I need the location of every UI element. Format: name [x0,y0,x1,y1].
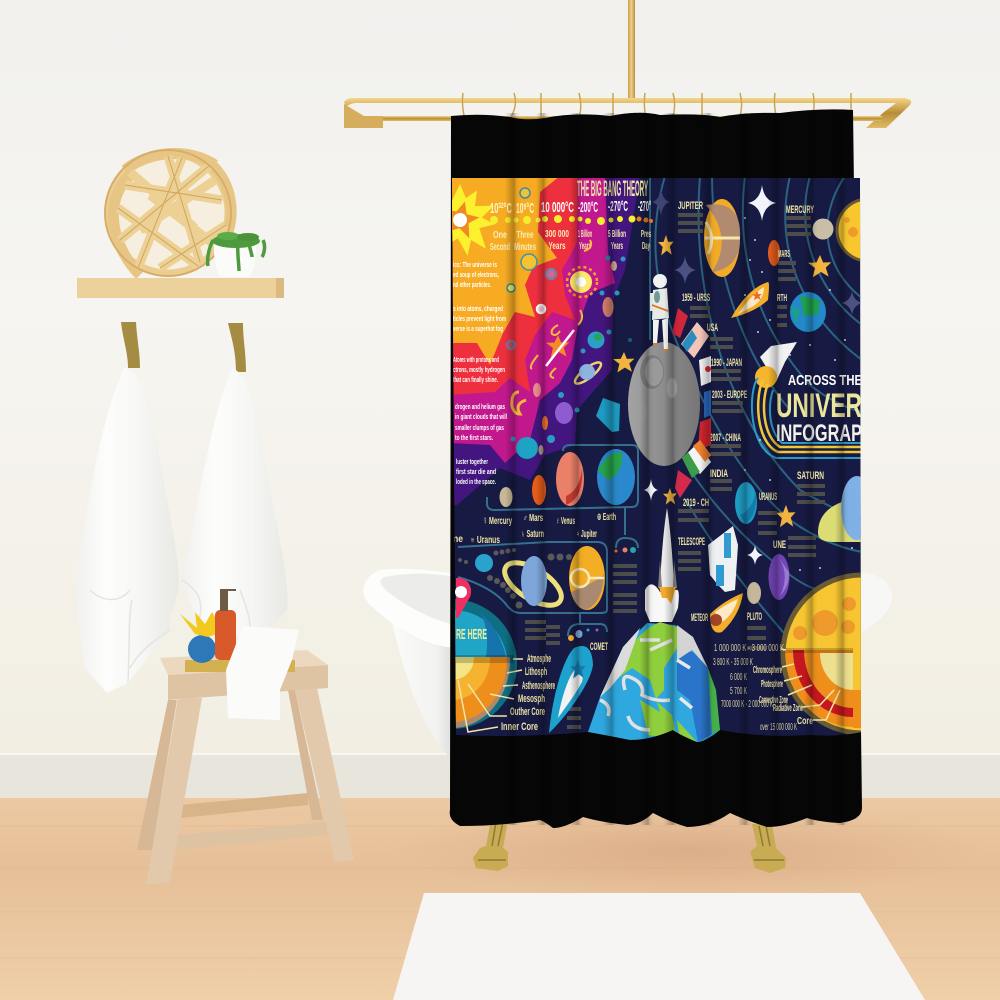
jupiter [704,199,740,277]
galaxies and atoms in colour bands [507,188,597,414]
era labels [490,230,651,251]
planet symbols and names [454,512,616,543]
space programme timeline labels: METEOR [691,612,708,624]
era labels: Day [642,241,650,252]
era labels: 1 Billion [578,229,592,240]
temperature scale: -270°C [608,198,628,215]
planet symbols and names: ♄ Saturn [521,529,544,540]
era labels: One [493,230,507,241]
history text blocks: s into atoms, charged [453,304,503,313]
temperature scale: 10 000°C [541,199,574,216]
crystal [596,398,620,432]
gold tray [185,660,295,672]
earth layer labels [458,653,555,733]
history text blocks: nd other particles. [453,280,491,289]
era labels: Years [579,241,591,252]
space shuttle [755,342,797,388]
history text blocks: loded in the space. [456,477,496,486]
history text blocks: in giant clouds that will [455,412,507,421]
wall background [0,0,1000,760]
space programme timeline labels: 2007 - CHINA [710,432,741,444]
temperature scale: -200°C [578,199,598,216]
earth layer labels: Atmosphe [527,653,551,665]
era labels: 5 Billion [608,229,626,240]
history text blocks: ics: The universe is [453,260,497,269]
planet symbols and names: ☿ Mercury [483,516,512,527]
rocket smoke [645,584,679,622]
shower curtain [450,109,862,828]
printed artwork: Pres [641,229,651,240]
blue vase with yellow flower [180,612,228,663]
jupiter small [569,546,605,610]
temperature scale [490,200,651,213]
moon [628,342,700,466]
right curtain foot [750,824,786,873]
star speckles [744,217,853,571]
bath rug [393,893,925,1000]
printed artwork: Asthenosphere [522,680,555,692]
printed artwork: -270° [638,198,651,215]
space programme timeline labels: USA [707,322,718,334]
history text blocks: ctrons, mostly hydrogen [453,365,505,374]
space programme timeline labels: TELESCOPE [678,536,705,548]
big sun cross-section [783,575,941,733]
earth planet [790,292,826,332]
sun layer temperatures and names: 3 800 K - 35 000 K [713,657,753,668]
title rainbow stripes [752,378,862,458]
printed artwork: RTH [777,293,787,304]
sun layer temperatures and names: Core [797,716,813,727]
history text blocks: luster together [456,457,488,466]
comet orange [731,282,769,318]
grey dot trails [458,548,572,608]
era labels: Years [548,241,566,252]
neptune planet [768,554,790,600]
orbit lines [650,176,862,640]
planet symbols and names: ♂ Mars [523,513,543,524]
text placeholder bars [525,484,825,729]
map pin [455,578,471,618]
saturn large [818,476,873,542]
era labels: 300 000 [545,229,569,240]
main title: UNIVER [776,387,862,425]
mercury planet [812,218,834,240]
sun layer temperatures and names [713,643,840,733]
history text blocks: ed soup of electrons, [453,270,499,279]
planet symbols and names: ♃ Jupiter [576,529,597,540]
planet symbols and names: ne [453,534,463,545]
jupiter label: JUPITER [678,200,703,212]
sun layer temperatures and names: 5 700 K [730,686,747,697]
space programme timeline labels: INDIA [710,468,728,480]
uranus [735,482,757,524]
left curtain foot [473,820,508,871]
curtain fold shading [505,113,849,825]
decorative four point stars [644,185,863,565]
earth layer labels: Inner Core [501,721,538,733]
sun layer temperatures and names: over 15 000 000 K [760,722,797,733]
space programme timeline labels: 1990 - JAPAN [711,357,742,369]
history text blocks: verse is a superhot fog [453,324,503,333]
sun layer temperatures and names: 7000 000 K - 2 000 000 K [721,699,773,710]
era labels: Minutes [514,242,536,253]
timeline dots [490,215,653,225]
mars label [778,249,796,281]
potted plant [208,232,265,277]
satellite telescope [708,526,738,592]
printed artwork: COMET [590,641,608,653]
cosmic colour bands [450,170,640,505]
sun top right [836,198,860,262]
bathtub [363,569,892,764]
history text blocks: drogen and helium gas [455,402,505,411]
printed artwork [452,178,861,742]
flags around the moon [672,308,711,498]
pluto planet [747,582,761,604]
mercury label [786,204,814,236]
temperature scale: 10³²°C [490,200,512,217]
earth label [777,293,787,327]
earth at launch pad [588,622,720,746]
comet blue [549,646,593,733]
earth layer labels: Outher Core [510,706,545,718]
jupiter label [678,200,703,233]
shower rod [344,0,911,128]
printed artwork: PLUTO [747,611,762,623]
history text blocks: that can finally shine. [453,375,498,384]
woven wicker disc [105,150,231,276]
era labels: Three [516,230,534,241]
small earth bubble [588,332,604,348]
main title: ACROSS THE [788,372,862,389]
saturn small [502,556,564,608]
right towel [182,368,287,640]
rocket [658,508,677,604]
planet symbols and names: ♀ Venus [556,516,575,527]
temperature scale: 10⁹°C [516,200,534,217]
tiny planets row [568,547,636,641]
earth layer labels: Mesosph [518,693,545,705]
inner planets row [500,449,635,507]
neptune label: UNE [773,539,786,551]
neptune small [475,554,493,572]
planet symbols and names: ♅ Uranus [470,535,500,546]
small ringed planet [574,361,602,385]
sun layer temperatures and names: Convective Zone [759,695,788,706]
space programme timeline labels: 1959 - URSS [682,292,710,304]
sun layer temperatures and names: 1 000 000 K - 3 000 000 K [714,643,784,654]
left towel [75,368,179,693]
main title [777,375,860,441]
astronaut [650,274,669,350]
planet connector lines [458,445,638,636]
sun layer temperatures and names: 6 000 K [730,672,747,683]
history text blocks: ticles prevent light from [453,314,506,323]
printed artwork: THE BIG BANG THEORY [577,176,648,201]
meteor [710,593,743,633]
curtain black fabric [450,109,862,828]
mars planet [768,240,780,266]
printed artwork: 2003 - EUROPE [712,389,747,401]
saturn label: SATURN [797,470,824,482]
space programme timeline labels: 2019 - CH [683,497,709,509]
history text blocks: Atoms with protons and [453,355,499,364]
soap dispenser [215,589,236,660]
wooden stool [137,650,354,885]
printed artwork: RE HERE [456,626,487,643]
era labels: Years [611,241,623,252]
mercury label: MERCURY [786,204,814,216]
history text blocks: to the first stars. [455,433,493,442]
folded hand towel [226,626,299,720]
sunburst [452,184,494,256]
scattered coloured bubbles [510,256,632,459]
sun layer temperatures and names: Radiative Zone [773,703,803,714]
baseboard [0,753,1000,798]
towel hooks [121,322,246,372]
wooden floor [0,798,1000,1000]
earth layer labels: Lithosph [525,666,547,678]
earth cross-section [387,599,517,729]
planet symbols and names: ⊕ Earth [597,512,616,523]
main title: INFOGRAP [776,420,862,447]
orange star [613,352,634,372]
space programme timeline labels [678,292,747,624]
sun layer temperatures and names: Photosphere [761,679,783,690]
history text blocks: smaller clumps of gas [455,423,504,432]
history text blocks [453,260,507,486]
shelf [77,278,284,298]
sun layer temperatures and names: Chromosphere [753,665,782,676]
printed artwork: URANUS [759,491,777,503]
history text blocks: first star die and [456,467,496,476]
mars label: MARS [778,249,790,260]
era labels: Second [490,242,510,253]
